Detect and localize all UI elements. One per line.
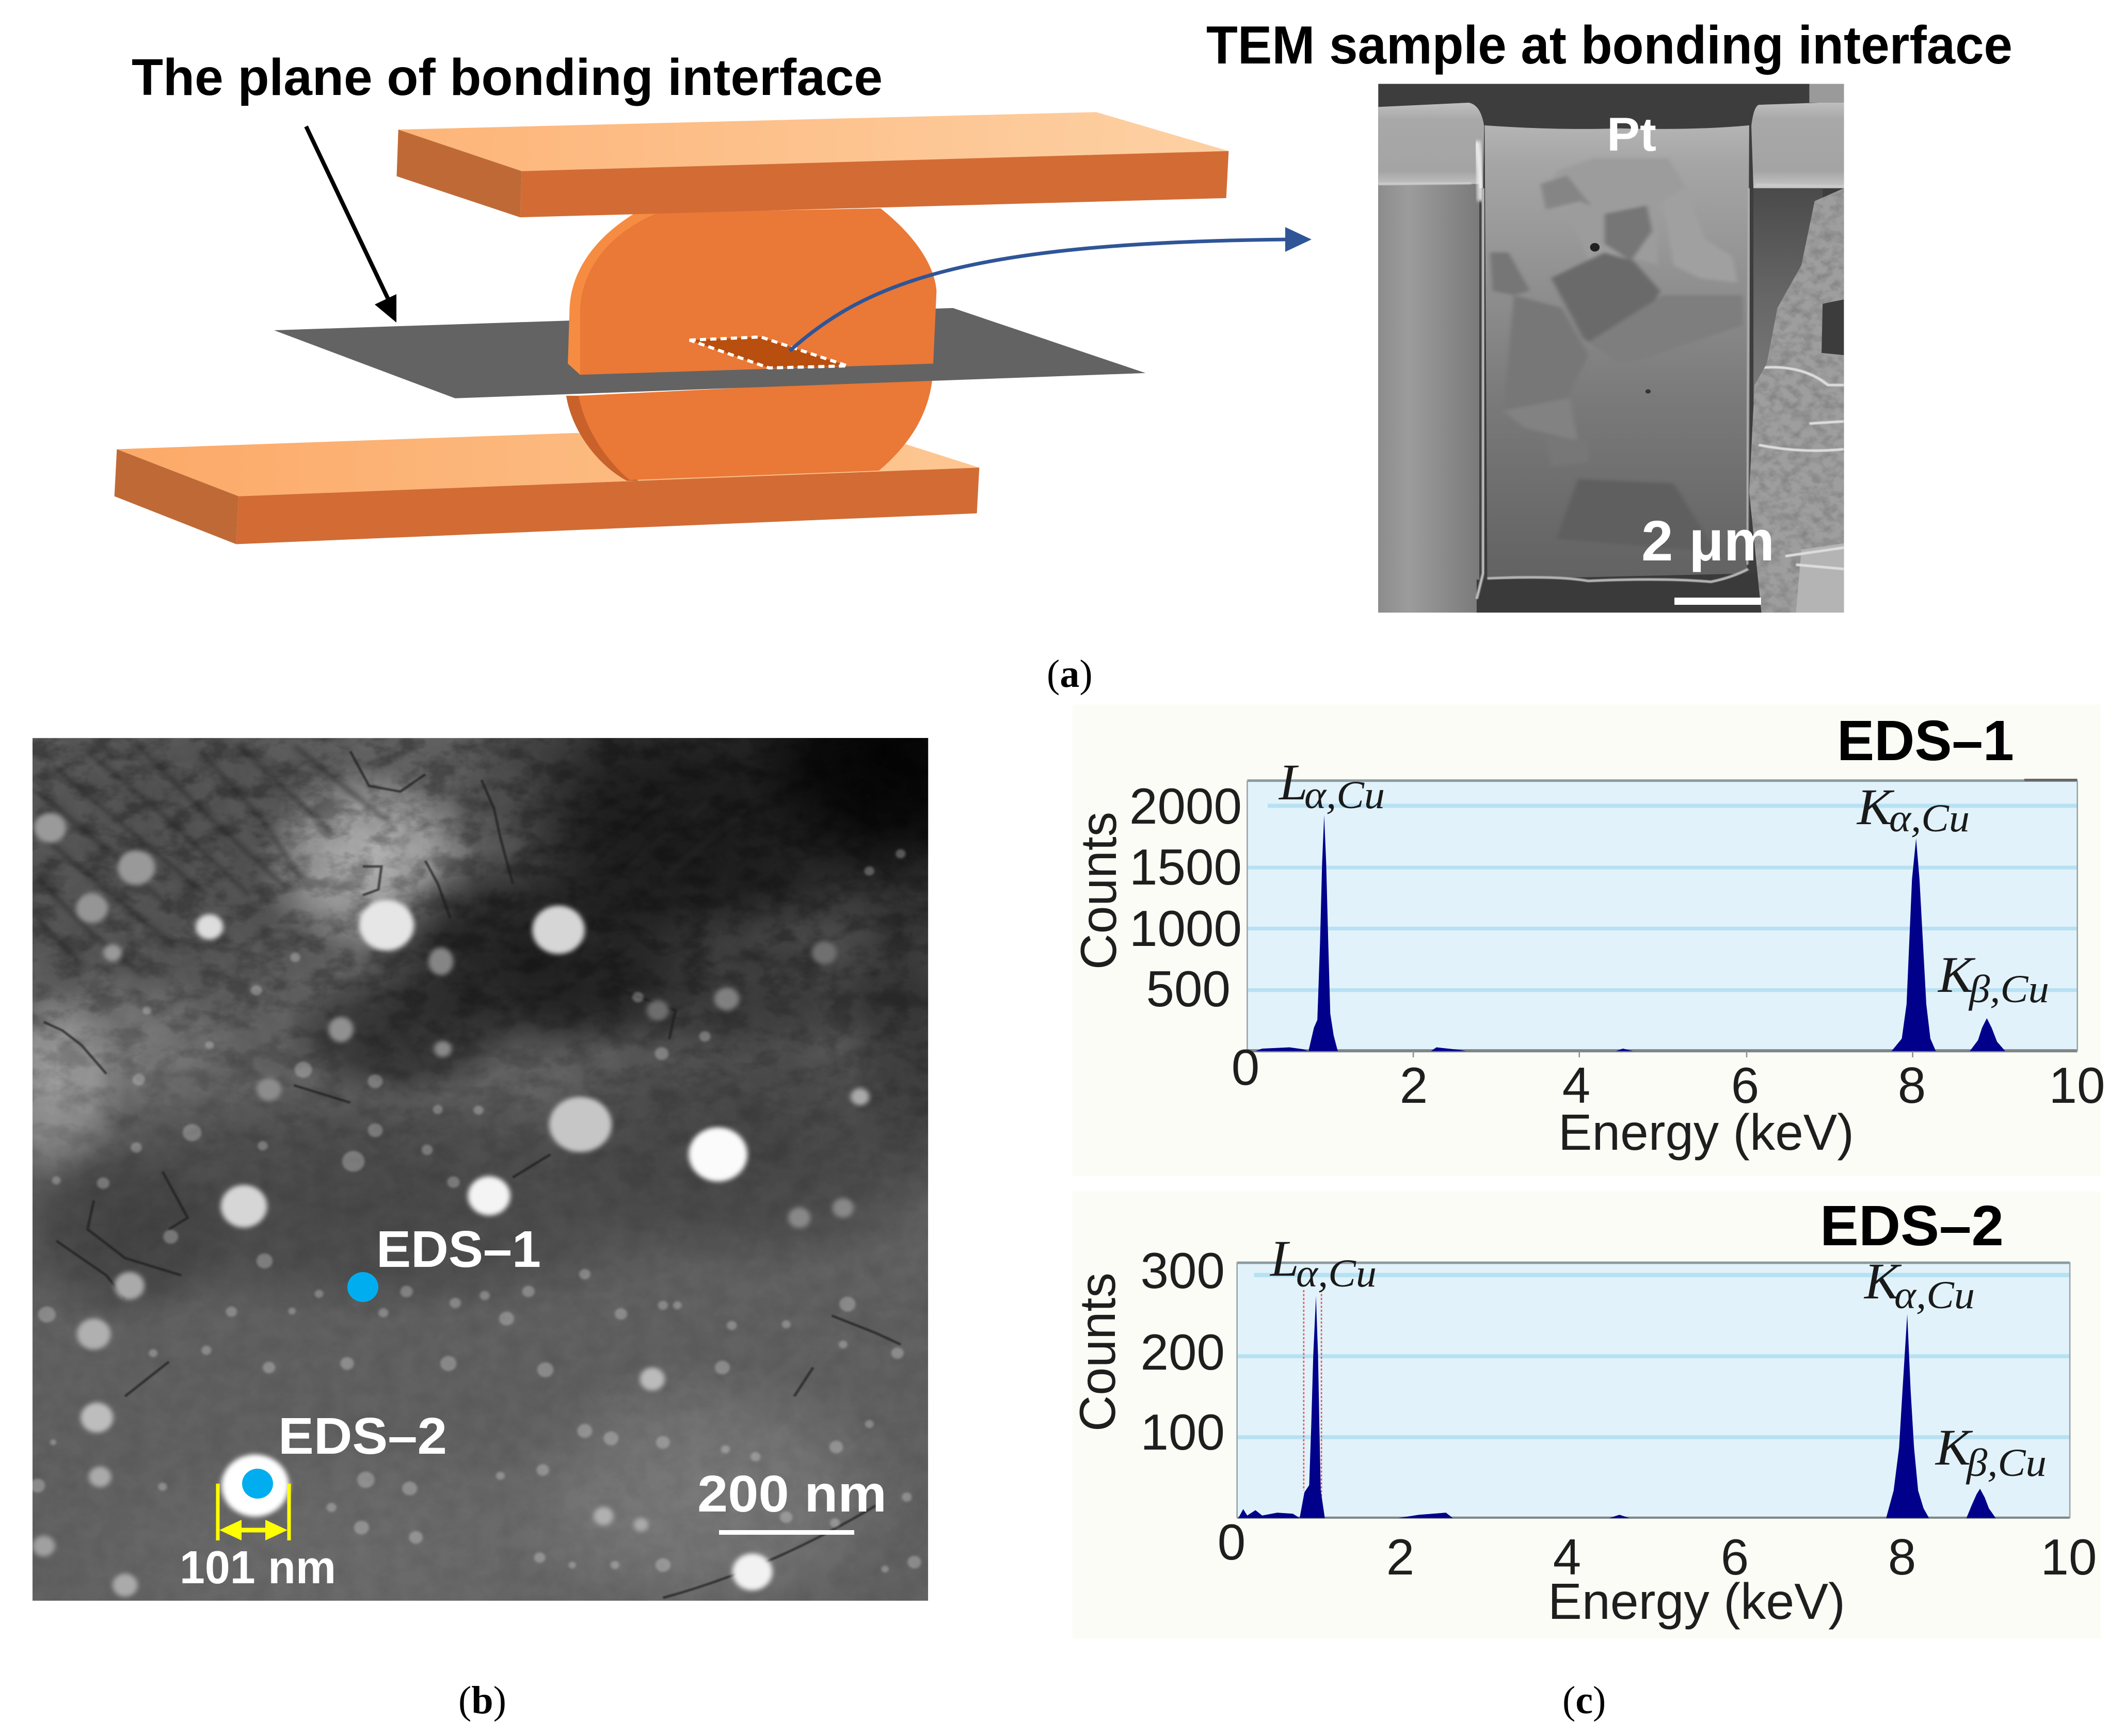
black arrow to plane [306,126,396,323]
scale label: 2 um: 2 μm [1641,509,1775,573]
peak label K beta: β,Cu [1966,1441,2047,1485]
x-axis numbers: 10 [2040,1529,2097,1585]
small precipitates [30,849,921,1572]
x-axis numbers: 4 [1553,1529,1581,1585]
schematic: plates, pillar and plane [115,112,1228,544]
peak label K beta [1937,946,2049,1011]
EDS-2 point marker [242,1469,273,1499]
x-axis numbers: 10 [2049,1057,2105,1114]
peak label L alpha: L [1278,753,1308,811]
label: EDS-2: EDS–2 [278,1407,447,1465]
axis title: Counts: Counts [1070,812,1127,970]
y-axis numbers: 2000 [1129,778,1242,834]
axis title: Energy: Energy (keV) [1548,1573,1845,1630]
blue arrow to TEM sample [790,227,1312,351]
EDS-1 point marker [347,1272,378,1302]
cracks [44,751,901,1598]
scale bar [1674,598,1761,605]
x-axis numbers [1232,1039,2105,1114]
fracture surface [1749,188,1844,613]
x-axis numbers: 6 [1721,1529,1749,1585]
axis title: Counts: Counts [1069,1273,1126,1432]
TEM image with precipitates [0,584,1120,1661]
x-axis numbers: 8 [1888,1529,1916,1585]
SEM micrograph of TEM lamella [1378,84,1844,613]
y-axis numbers [1140,1242,1225,1460]
panel c: EDS spectra [1069,704,2105,1722]
peak label K beta: β,Cu [1968,968,2049,1011]
x-axis numbers: 0 [1232,1039,1259,1096]
large precipitates [221,900,772,1590]
y-axis numbers: 500 [1146,960,1231,1017]
x-axis numbers [1218,1514,2097,1585]
label: 101 nm: 101 nm [180,1542,336,1594]
peak label K beta: K [1937,946,1975,1003]
x-axis numbers: 6 [1731,1057,1759,1114]
plot area EDS-1 [1247,779,2078,1057]
peak label K alpha: α,Cu [1894,1274,1975,1317]
label: Pt: Pt [1607,108,1656,161]
edges and highlights [1477,141,1481,201]
peak label K alpha: α,Cu [1889,797,1970,840]
heading: plane of bonding interface: The plane of bonding interface [132,49,883,106]
peak label L alpha: L [1269,1230,1299,1287]
y-axis numbers: 300 [1140,1242,1225,1299]
x-axis numbers: 2 [1400,1057,1428,1114]
spectrum EDS-2 [1069,1192,2101,1638]
y-axis numbers: 100 [1140,1404,1225,1460]
mottled surface texture [33,738,928,1601]
peak label L alpha: α,Cu [1296,1252,1377,1295]
lower half of bump [566,379,932,481]
grains [1490,158,1743,552]
plot area EDS-2 [1237,1262,2070,1519]
peak label K alpha: K [1856,778,1894,835]
x-axis numbers: 0 [1218,1514,1245,1570]
caption (c): (c) [1562,1679,1606,1722]
y-axis numbers [1129,778,1242,1017]
ripple texture [38,746,744,1068]
y-axis numbers: 1500 [1129,839,1242,895]
heading: EDS-1: EDS–1 [1837,709,2014,773]
peak label L alpha: α,Cu [1304,774,1385,817]
grey bonding plane [274,308,1145,398]
heading: TEM sample: TEM sample at bonding interface [1206,15,2012,75]
heading: EDS-2: EDS–2 [1820,1194,2004,1258]
x-axis numbers: 2 [1386,1529,1414,1585]
tonal regions [0,584,1120,1661]
x-axis numbers: 8 [1898,1057,1926,1114]
peak label K beta: K [1935,1419,1973,1476]
upper half of bump [568,208,936,375]
peak label K alpha [1863,1252,1975,1317]
peak label K beta [1935,1419,2047,1485]
label: EDS-1: EDS–1 [376,1220,541,1278]
medium precipitates [33,813,869,1597]
spectrum EDS-1 [1070,704,2105,1176]
peak label K alpha: K [1863,1252,1902,1310]
peak label L alpha [1269,1230,1377,1295]
y-axis numbers: 1000 [1129,900,1242,957]
caption (a): (a) [1047,652,1093,696]
peak label K alpha [1856,778,1970,840]
axis title: Energy: Energy (keV) [1558,1104,1854,1161]
panel b: TEM micrograph [0,584,1120,1722]
yellow dimension marker [218,1484,289,1540]
bottom copper plate [115,433,979,544]
caption (b): (b) [458,1679,506,1722]
x-axis numbers: 4 [1562,1057,1590,1114]
y-axis numbers: 200 [1140,1324,1225,1380]
scale bar [719,1530,854,1535]
top copper plate [397,112,1228,217]
peak label L alpha [1278,753,1385,817]
panel a: 3D schematic of bonding interface [115,15,2012,696]
label: 200 nm: 200 nm [697,1465,887,1523]
dashed sample region [690,337,848,368]
